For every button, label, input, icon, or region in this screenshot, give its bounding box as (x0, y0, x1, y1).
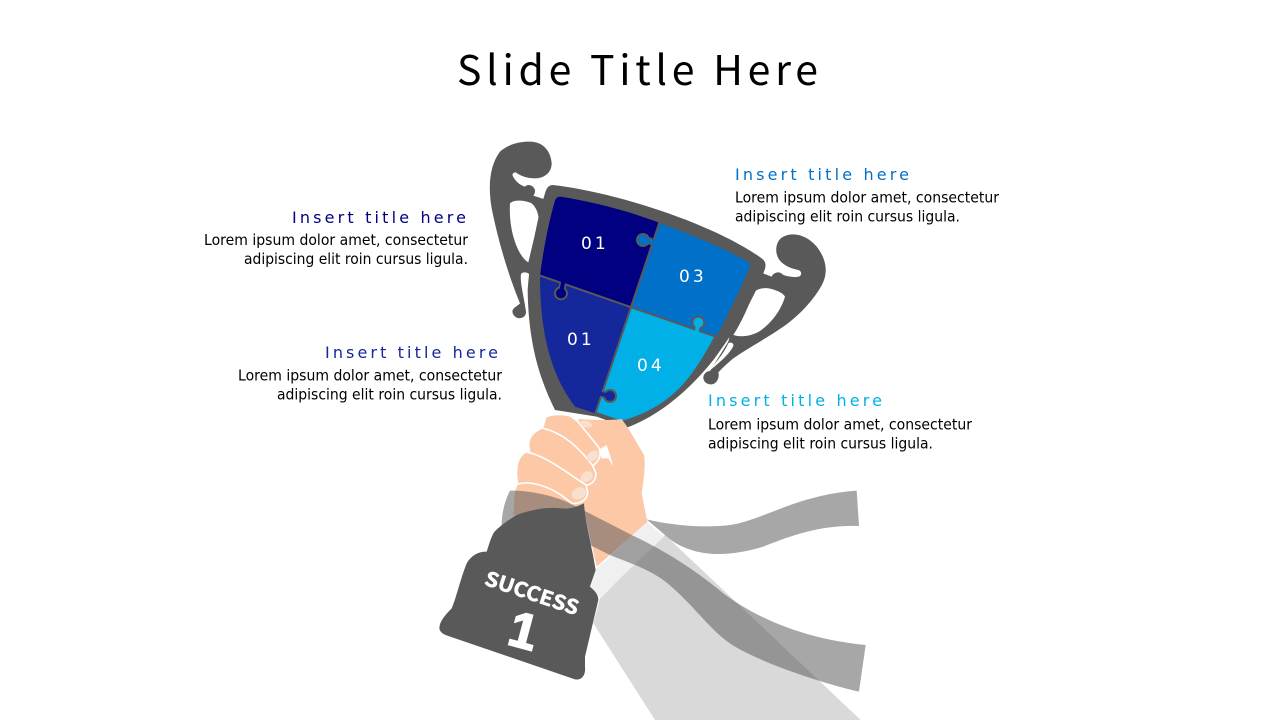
tab: cyan into blue (691, 316, 705, 334)
tab: blue into navy (636, 233, 656, 247)
piece number 01 top: 01 (581, 234, 609, 254)
ribbon upper right (647, 491, 859, 554)
trophy cup (528, 185, 765, 428)
ribbon lower right (502, 491, 866, 692)
text block lower right: Insert title here (708, 391, 882, 410)
text block middle left (238, 343, 503, 404)
tab: blue into cyan (598, 389, 617, 403)
fingernails (570, 419, 601, 502)
text block middle left: Insert title here (325, 343, 498, 362)
sleeve (593, 535, 861, 720)
seams (539, 223, 716, 413)
piece number 01 bottom: 01 (567, 330, 595, 350)
left handle (490, 142, 552, 318)
puzzle piece 03 (631, 223, 750, 336)
cup body (528, 185, 765, 428)
text block middle left: Lorem ipsum dolor amet, consectetur (238, 366, 503, 384)
trophy base (439, 503, 598, 680)
thumb highlight (598, 445, 613, 467)
finger outlines (517, 414, 600, 503)
text block top left: Lorem ipsum dolor amet, consectetur (204, 231, 469, 249)
hand skin (513, 414, 647, 567)
text block top right: adipiscing elit roin cursus ligula. (735, 208, 960, 226)
text block lower right: Lorem ipsum dolor amet, consectetur (708, 416, 973, 434)
text block top right: Lorem ipsum dolor amet, consectetur (735, 188, 1000, 206)
base label SUCCESS: SUCCESS (481, 563, 583, 621)
cuff (591, 522, 664, 597)
base label 1: 1 (503, 600, 544, 662)
piece number 03: 03 (679, 267, 707, 287)
text block top left (204, 208, 469, 268)
puzzle piece 04 (595, 307, 714, 421)
title: Slide Title Here (457, 37, 818, 97)
piece number 04: 04 (637, 356, 665, 376)
text block top left: Insert title here (292, 208, 466, 227)
right handle (703, 234, 826, 384)
text block top right: Insert title here (735, 165, 909, 184)
text block top right (735, 165, 1000, 226)
text block top left: adipiscing elit roin cursus ligula. (244, 250, 468, 268)
hand, sleeve, ribbon and base (439, 414, 866, 720)
text block middle left: adipiscing elit roin cursus ligula. (277, 386, 502, 404)
puzzle piece 01 bottom (540, 276, 631, 413)
tab: navy into blue (554, 281, 568, 300)
text block lower right: adipiscing elit roin cursus ligula. (708, 434, 933, 452)
text block lower right (708, 391, 973, 452)
puzzle piece 01 top (540, 197, 659, 307)
